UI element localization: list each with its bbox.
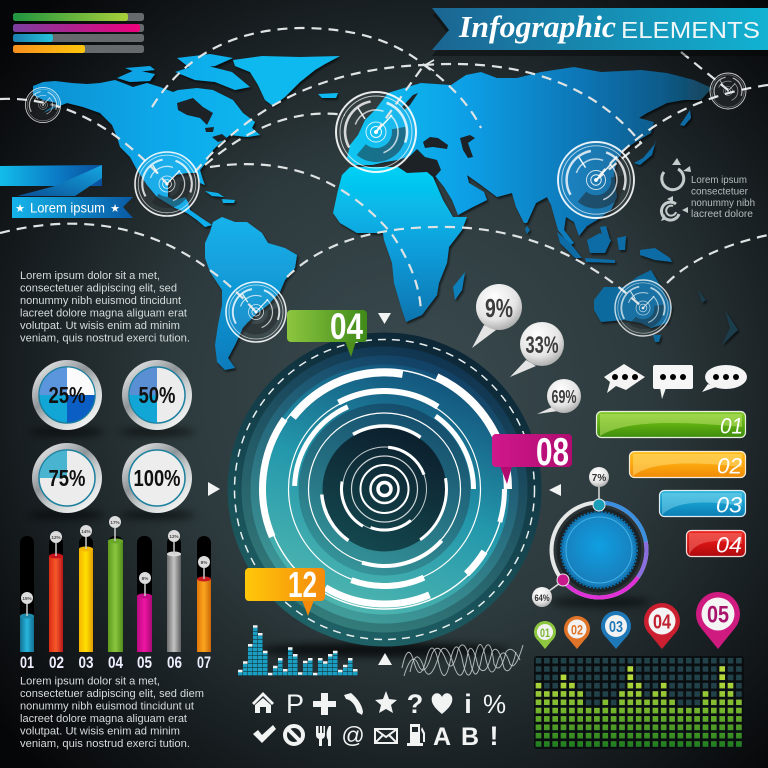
icon: plus	[313, 693, 336, 715]
tag 04	[287, 306, 367, 357]
column 06: 06	[167, 653, 182, 672]
baltic sea	[402, 93, 418, 110]
marker 64%: 64%	[534, 593, 550, 604]
side note with cycle icons: consectetuer	[691, 186, 748, 198]
dial 75%	[32, 443, 102, 513]
paragraph top left: volutpat. Ut wisis enim ad minim	[20, 320, 180, 332]
target: south america	[226, 282, 286, 342]
route crossing arrow	[425, 60, 434, 71]
tag 08: 08	[536, 431, 569, 474]
side note with cycle icons: Lorem ipsum	[691, 174, 747, 186]
speech bubble 33%	[510, 322, 564, 377]
new zealand	[698, 290, 738, 345]
dial face	[562, 512, 636, 588]
pin 04: 04	[653, 612, 672, 634]
hudson bay	[177, 98, 213, 125]
paragraph bottom left: lacreet dolore magna aliguam erat	[20, 713, 187, 725]
column 04: 04	[108, 653, 123, 672]
label bar 03: 03	[716, 492, 743, 518]
label bar 02: 02	[717, 454, 742, 478]
arrow: right	[549, 484, 561, 496]
pin 03: 03	[609, 619, 623, 636]
tasmania	[653, 335, 661, 342]
speech bubble 9%: 9%	[485, 293, 513, 323]
column 02: 12%	[51, 535, 61, 540]
column 06	[167, 530, 182, 672]
radar arcs	[263, 369, 508, 609]
icon: heart	[432, 693, 452, 714]
route lines	[0, 28, 768, 313]
target: alaska	[25, 87, 61, 123]
side note with cycle icons: nonummy nibh	[691, 197, 755, 209]
chat: rectangle	[653, 365, 693, 399]
target: mexico	[135, 152, 199, 216]
icon: info: i	[464, 689, 472, 719]
paragraph top left: veniam, quis nostrud exerci tution.	[20, 332, 190, 344]
paragraph top left: nonummy nibh euismod tincidunt	[20, 295, 181, 307]
icon: phone	[344, 693, 363, 715]
icon: parking: P	[286, 689, 304, 719]
lorem ipsum ribbon: ★	[110, 203, 120, 215]
icon: question: ?	[407, 689, 423, 719]
africa	[333, 167, 467, 322]
icon: no entry	[285, 726, 303, 744]
lit dots	[538, 666, 739, 747]
icon: star	[375, 691, 397, 713]
asian islands	[525, 110, 691, 263]
dial 25%: 25%	[48, 382, 86, 408]
blue bar equalizer	[238, 625, 358, 676]
target markers	[25, 73, 746, 342]
label bar 01: 01	[720, 414, 743, 438]
dial 50%: 50%	[138, 382, 176, 408]
column 02: 02	[49, 653, 64, 672]
column 07: 8%	[201, 560, 207, 565]
target: australia	[615, 280, 671, 336]
column 04	[108, 516, 123, 672]
paragraph bottom left: veniam, quis nostrud exerci tution.	[20, 738, 190, 750]
column 01	[20, 536, 34, 672]
chat: oval	[702, 365, 747, 392]
icon: exclamation: !	[490, 721, 498, 751]
arctic islands	[117, 54, 250, 90]
column 07: 07	[197, 653, 211, 672]
arrow: top	[378, 313, 391, 324]
column 01: 15%	[22, 596, 32, 601]
dial rim	[555, 506, 643, 594]
speech bubble 69%	[537, 379, 581, 414]
column 05	[137, 536, 152, 672]
paragraph top left: Lorem ipsum dolor sit a met,	[20, 270, 160, 282]
pin 01	[534, 621, 556, 649]
column 01: 01	[20, 653, 34, 672]
column 05: 05	[137, 653, 152, 672]
label bar 04: 04	[716, 532, 742, 558]
speech bubble 33%: 33%	[526, 332, 558, 359]
marker 64%	[532, 574, 569, 607]
target: europe	[336, 92, 416, 172]
paragraph top left	[20, 270, 190, 344]
paragraph bottom left: consectetuer adipiscing elit, sed diem	[20, 688, 204, 700]
title banner	[432, 8, 768, 56]
lorem ipsum ribbon: ★	[15, 203, 25, 215]
label bars	[596, 412, 746, 558]
title banner: ELEMENTS	[621, 17, 760, 43]
dial 100%	[122, 443, 192, 513]
pin 05	[696, 592, 740, 649]
paragraph top left: lacreet dolore magna aliguam erat	[20, 308, 187, 320]
eurasia	[347, 67, 712, 245]
paragraph bottom left: volutpat. Ut wisis enim ad minim	[20, 726, 180, 738]
side note with cycle icons: lacreet dolore	[691, 208, 753, 220]
paragraph top left: consectetuer adipiscing elit, sed	[20, 282, 177, 294]
marker 7%: 7%	[592, 473, 606, 484]
great lakes	[205, 127, 228, 142]
paragraph bottom left	[20, 676, 204, 750]
icon: house	[252, 692, 274, 713]
label bar 02	[630, 452, 746, 478]
dial 50%	[122, 360, 192, 430]
black sea	[423, 137, 448, 149]
speech bubble 69%: 69%	[552, 387, 576, 407]
waveform	[402, 644, 523, 676]
pin 04	[644, 603, 680, 649]
icon: at sign: @	[341, 722, 365, 748]
mediterranean sea	[372, 149, 441, 178]
dial shadows	[29, 428, 195, 519]
tag 04: 04	[330, 306, 363, 347]
icon set	[252, 689, 506, 751]
column 03: 03	[78, 653, 94, 672]
world map	[33, 54, 738, 370]
lorem ipsum ribbon	[0, 165, 133, 218]
south america	[205, 217, 297, 370]
pin 02	[564, 616, 590, 649]
speech bubble 9%	[472, 284, 522, 348]
pin 03	[601, 611, 631, 649]
arrow: left	[208, 482, 220, 496]
lorem ipsum ribbon: Lorem ipsum	[30, 200, 105, 216]
progress bars top left	[13, 13, 144, 53]
column 03: 14%	[81, 529, 91, 534]
icon: check	[253, 725, 276, 743]
icon: cycle large	[661, 169, 684, 220]
column 04: 17%	[110, 520, 120, 525]
chat icons	[604, 364, 747, 399]
madagascar	[453, 272, 465, 300]
icon: letter B: B	[461, 723, 479, 751]
big circle shadow	[259, 643, 509, 657]
column 02	[49, 531, 64, 672]
column 07	[197, 536, 211, 672]
led equalizer panel	[534, 656, 744, 749]
title banner: Infographic	[458, 9, 616, 44]
label bar 03	[660, 490, 746, 518]
tag 12	[245, 564, 325, 616]
chat: diamond	[604, 364, 645, 393]
target: china	[558, 142, 634, 218]
column 05: 8%	[142, 576, 148, 581]
unlit dots	[536, 661, 743, 744]
label bar 04	[686, 530, 746, 558]
label bar 01	[596, 412, 746, 438]
icon: cutlery	[316, 726, 331, 746]
icon: percent: %	[483, 689, 506, 719]
pin 05: 05	[707, 602, 729, 628]
radar bands	[228, 332, 542, 646]
caribbean islands	[205, 191, 235, 203]
icon: envelope	[375, 729, 397, 743]
icon: letter A: A	[433, 723, 451, 751]
percent dials	[29, 360, 195, 519]
tag 12: 12	[288, 564, 317, 605]
knob dial	[532, 467, 650, 608]
central concentric radar	[228, 332, 542, 646]
column 06: 12%	[169, 534, 179, 539]
pin 02: 02	[571, 622, 583, 638]
australia	[594, 270, 672, 328]
pin 01: 01	[540, 626, 550, 640]
column chart	[20, 516, 211, 672]
side note with cycle icons	[661, 158, 755, 221]
marker 7%	[589, 467, 609, 511]
iceland	[318, 93, 338, 98]
paragraph bottom left: Lorem ipsum dolor sit a met,	[20, 676, 160, 688]
dashed border ring	[234, 340, 534, 640]
dial 25%	[32, 360, 102, 430]
map pins	[534, 592, 740, 649]
dial 75%: 75%	[48, 465, 86, 491]
arrow: bottom	[378, 653, 392, 665]
caspian sea	[460, 135, 475, 158]
greenland	[233, 56, 340, 106]
target: kamchatka	[710, 73, 746, 109]
icon: fuel pump	[407, 724, 425, 746]
paragraph bottom left: nonummy nibh euismod tincidunt ut	[20, 700, 194, 712]
north america	[33, 80, 260, 227]
tag 08	[492, 431, 572, 484]
dial 100%: 100%	[134, 465, 180, 491]
column 03	[78, 525, 94, 672]
